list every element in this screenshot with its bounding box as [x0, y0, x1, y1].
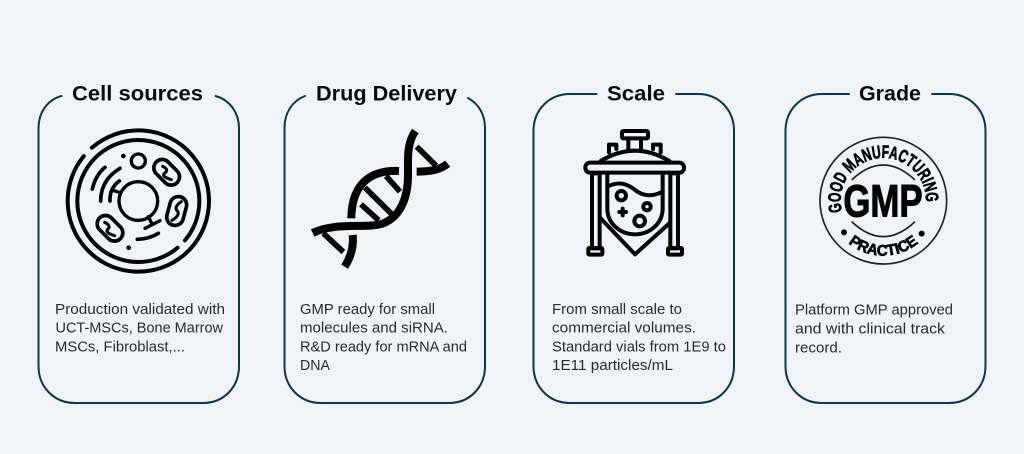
text: cell sources: Production validated with [55, 302, 225, 318]
heading: drug delivery: Drug Delivery [316, 83, 457, 106]
text: drug delivery: molecules and siRNA. [300, 321, 448, 337]
text: grade: record. [795, 340, 842, 356]
text: scale [552, 302, 726, 374]
panel: drug delivery [284, 83, 485, 403]
card outline: scale [534, 94, 734, 403]
heading: scale: Scale [607, 83, 665, 106]
text: drug delivery [300, 302, 467, 374]
text: scale: From small scale to [552, 302, 682, 318]
heading: cell sources: Cell sources [72, 83, 203, 106]
icon: bioreactor [585, 131, 684, 255]
icon: cell [39, 101, 238, 301]
icon: GMP stamp: GMP [843, 176, 923, 227]
text: cell sources: UCT-MSCs, Bone Marrow [56, 321, 224, 337]
text: cell sources: MSCs, Fibroblast,... [55, 340, 185, 356]
panel: scale [534, 83, 734, 403]
card outline: cell sources [38, 96, 239, 403]
icon: DNA helix [313, 131, 448, 267]
heading: grade: Grade [859, 83, 921, 106]
text: grade: and with clinical track [795, 322, 946, 338]
text: drug delivery: R&D ready for mRNA and [300, 340, 467, 356]
icon: GMP stamp [819, 136, 948, 265]
icon: GMP stamp: GOOD MANUFACTURING [828, 145, 939, 213]
text: scale: commercial volumes. [552, 321, 696, 337]
text: drug delivery: DNA [300, 358, 330, 374]
text: drug delivery: GMP ready for small [300, 302, 435, 318]
text: cell sources [55, 302, 225, 356]
panel: cell sources [38, 83, 239, 403]
text: scale: Standard vials from 1E9 to [552, 340, 726, 356]
card outline: grade [786, 94, 986, 403]
panel: grade [784, 83, 986, 404]
text: grade: Platform GMP approved [795, 302, 953, 318]
text: scale: 1E11 particles/mL [552, 358, 673, 374]
card outline: drug delivery [284, 96, 485, 403]
text: grade [795, 302, 953, 356]
icon: GMP stamp: PRACTICE [848, 234, 918, 256]
